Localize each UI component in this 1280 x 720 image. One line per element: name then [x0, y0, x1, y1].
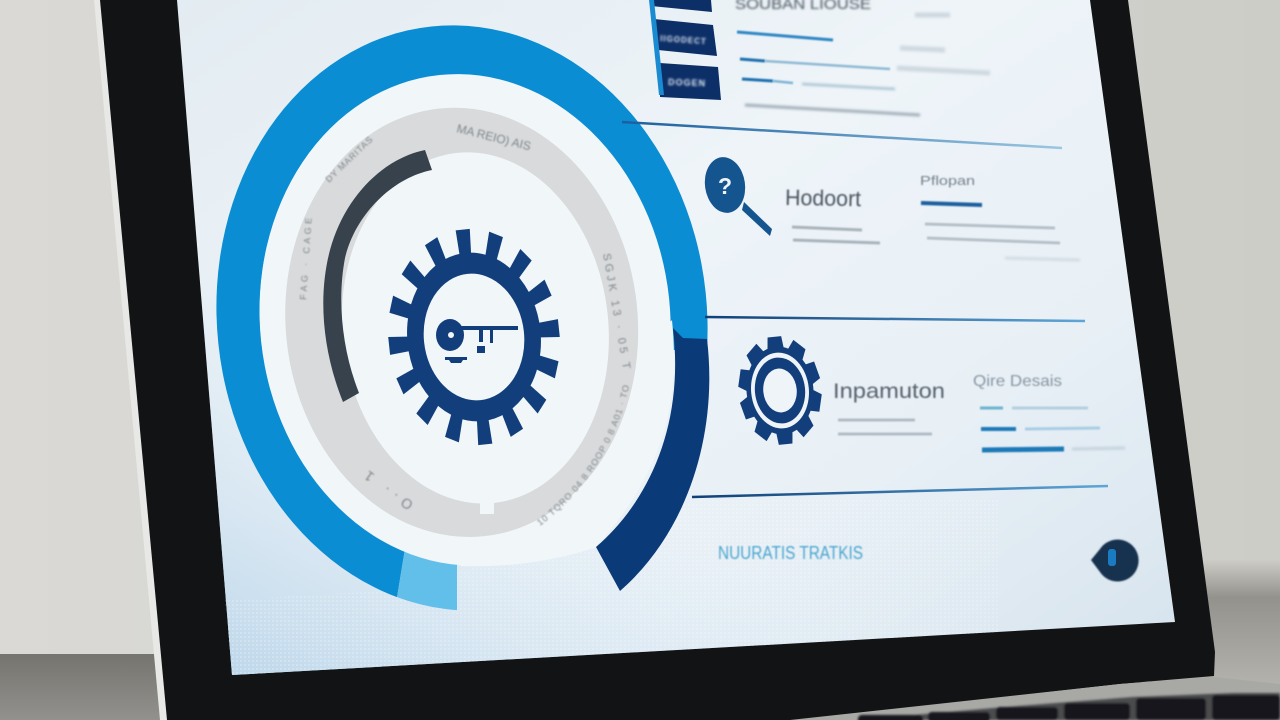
laptop silver edge — [94, 0, 170, 720]
navy tab 2 — [654, 19, 717, 56]
panel: Inpamuton section — [733, 332, 1125, 450]
screen surface — [177, 0, 1175, 675]
panel: circular diagram — [216, 25, 710, 610]
label: lower right: 10 TQRO 04 8 ROOP 0 8 A01 · TOA 1 — [536, 384, 630, 526]
tab 3 text: DOGEN — [668, 77, 706, 88]
label: top: MA REIO) AIS — [455, 121, 532, 153]
background: table right — [1150, 560, 1280, 685]
heading: Inpamuton — [833, 380, 945, 403]
side bar — [921, 203, 982, 205]
label: right: SGJK 13 · 05 T — [600, 252, 633, 373]
background: table left — [0, 654, 200, 720]
key — [436, 319, 518, 363]
ring segment: blue — [216, 25, 708, 598]
laptop hinge band — [790, 677, 1280, 720]
navy tab 3 — [660, 63, 721, 100]
ring segment: navy — [596, 328, 709, 591]
side label: Qire Desais — [973, 373, 1062, 390]
side bars — [980, 408, 1125, 450]
inner white disc — [235, 54, 695, 586]
heading: Hodoort — [785, 185, 861, 211]
icon: magnifier with question mark — [701, 154, 772, 236]
gear — [378, 221, 570, 453]
description lines — [838, 420, 932, 434]
label: lower left: O·· 1 — [356, 464, 416, 514]
ring notch — [480, 503, 494, 514]
ring labels — [298, 121, 633, 526]
icon: gear with key — [378, 221, 570, 453]
side lines — [925, 224, 1080, 260]
icon: magnifier with question mark: ? — [718, 173, 732, 199]
divider 1 — [622, 122, 1062, 148]
grey ring — [264, 90, 659, 555]
dark arc — [323, 150, 432, 402]
icon: gear — [733, 332, 827, 449]
navy tab 1 — [650, 0, 712, 12]
top bars — [737, 15, 990, 115]
panel: top section — [649, 0, 990, 115]
icon: footer pin — [1091, 540, 1139, 582]
keyboard — [857, 693, 1280, 720]
tab accent strip — [649, 0, 664, 95]
panel: Hodoort section — [701, 154, 1080, 260]
ring segment: light blue — [397, 552, 457, 610]
description lines — [792, 227, 880, 243]
screen — [177, 0, 1175, 675]
side label: Pflopan — [920, 173, 975, 188]
footer text: NUURATIS TRATKIS — [718, 543, 863, 563]
label: upper left: DY MARITAS — [323, 134, 375, 184]
divider 2 — [705, 317, 1085, 321]
divider 3 — [692, 486, 1108, 497]
label: left: FAG · CAGE — [298, 214, 314, 300]
tab 2 text: IIGODECT — [660, 34, 707, 46]
